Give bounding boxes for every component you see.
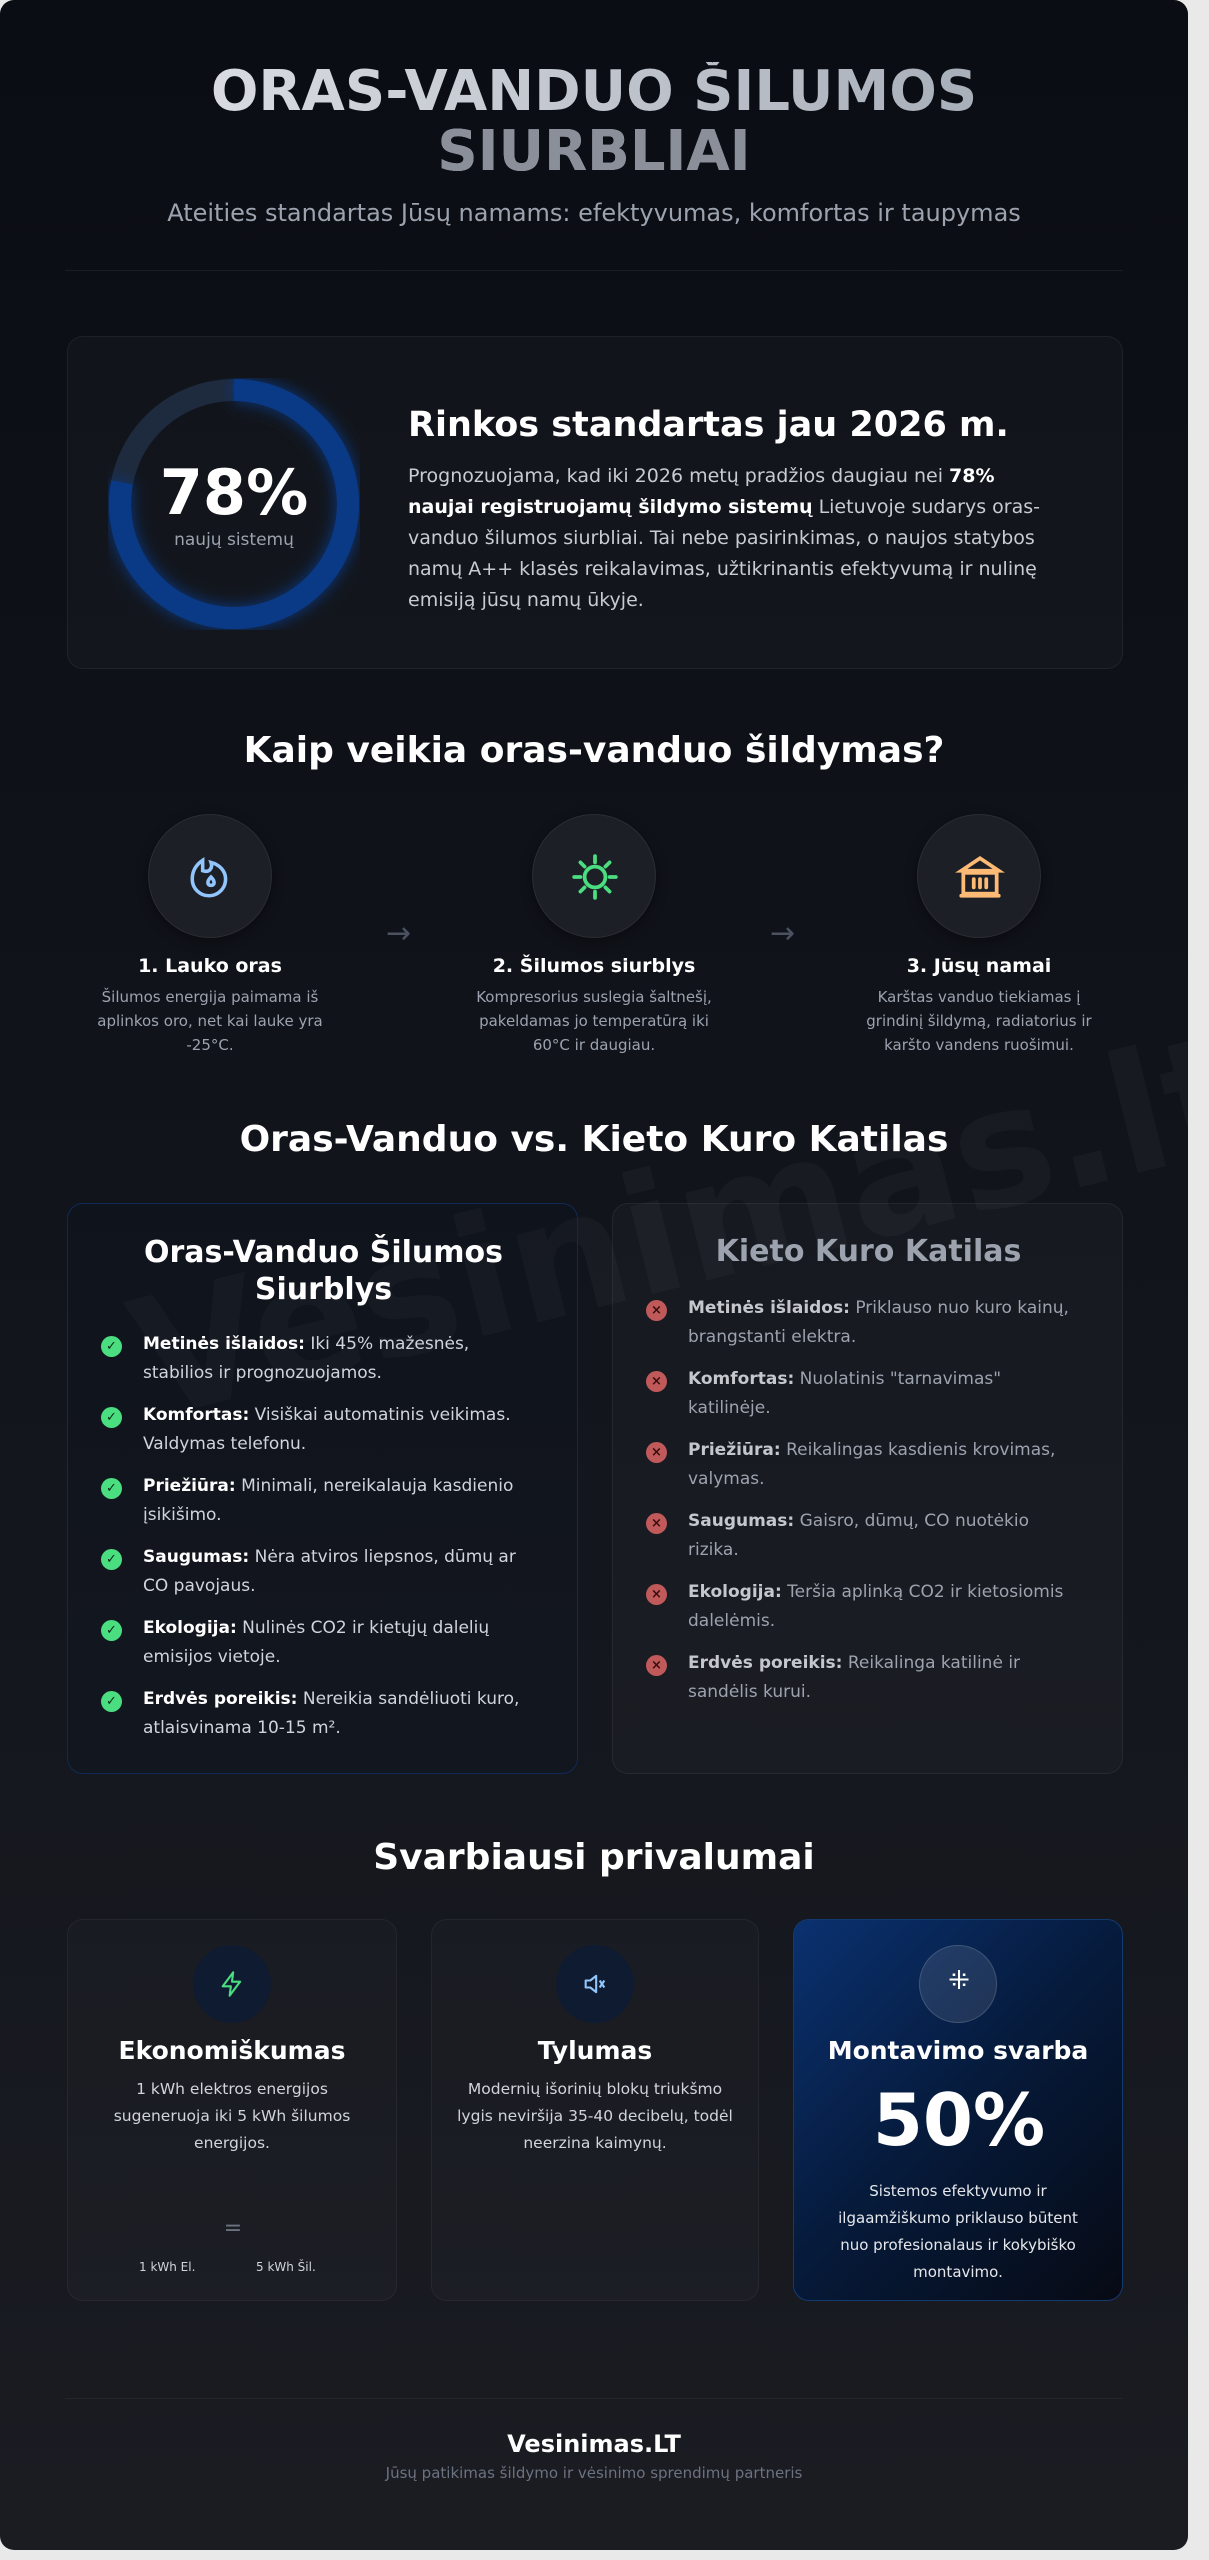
footer: Vesinimas.LT xyxy=(507,2430,681,2458)
panel: heat pump: Komfortas: Visiškai automatinis veikimas. Valdymas telefonu. xyxy=(143,1405,511,1454)
title: ORAS-VANDUO ŠILUMOS xyxy=(211,59,977,124)
panel: heat pump: ✓ xyxy=(106,1339,117,1354)
panel: solid fuel boiler: Komfortas: Nuolatinis "tarnavimas" katilinėje. xyxy=(688,1369,1001,1418)
panel: installation xyxy=(793,1919,1123,2301)
panel: solid fuel boiler: × xyxy=(651,1587,662,1602)
panel: heat pump: ✓ xyxy=(106,1552,117,1567)
panel: installation: ⁜ xyxy=(948,1966,970,1996)
step 2: Kompresorius suslegia šaltnešį, pakeldamas jo temperatūrą iki 60°C ir daugiau. xyxy=(476,988,712,1054)
panel: heat pump: Oras-Vanduo Šilumos xyxy=(144,1235,503,1270)
subtitle: Ateities standartas Jūsų namams: efektyvumas, komfortas ir taupymas xyxy=(167,199,1021,227)
chart: donut 78% xyxy=(108,378,360,630)
panel: heat pump: ✓ xyxy=(106,1481,117,1496)
footer xyxy=(384,2430,802,2482)
panel: solid fuel boiler xyxy=(612,1203,1123,1774)
panel: heat pump: Ekologija: Nulinės CO2 ir kietųjų dalelių emisijos vietoje. xyxy=(143,1618,489,1667)
panel: solid fuel boiler: Saugumas: Gaisro, dūmų, CO nuotėkio rizika. xyxy=(688,1511,1029,1560)
step 3 xyxy=(866,955,1092,1054)
chart: donut 78%: naujų sistemų xyxy=(174,530,294,550)
icon: house xyxy=(917,814,1041,938)
step 1: 1. Lauko oras xyxy=(138,955,282,977)
panel: installation: Sistemos efektyvumo ir ilgaamžiškumo priklauso būtent nuo profesionalaus ir kokybiško montavimo. xyxy=(838,2182,1078,2281)
panel: quietness: Modernių išorinių blokų triukšmo lygis neviršija 35-40 decibelų, todėl neerzina kaimynų. xyxy=(457,2080,733,2152)
step 1: Šilumos energija paimama iš aplinkos oro, net kai lauke yra -25°C. xyxy=(97,988,323,1054)
step 2 xyxy=(476,954,712,1054)
panel: economy: 1 kWh elektros energijos sugeneruoja iki 5 kWh šilumos energijos. xyxy=(114,2080,350,2152)
panel: solid fuel boiler: Metinės išlaidos: Priklauso nuo kuro kainų, brangstanti elektra. xyxy=(688,1298,1069,1347)
panel: solid fuel boiler: × xyxy=(651,1658,662,1673)
panel: heat pump xyxy=(67,1203,578,1774)
title: SIURBLIAI xyxy=(437,119,751,184)
panel: heat pump: Metinės išlaidos: Iki 45% mažesnės, stabilios ir prognozuojamos. xyxy=(143,1334,469,1383)
step 2: 2. Šilumos siurblys xyxy=(493,955,695,977)
panel: quietness xyxy=(431,1919,759,2301)
panel: quietness: Tylumas xyxy=(538,2036,652,2065)
panel: heat pump: Erdvės poreikis: Nereikia sandėliuoti kuro, atlaisvinama 10-15 m². xyxy=(143,1689,519,1738)
panel: installation: Montavimo svarba xyxy=(828,2036,1088,2065)
panel: economy: = xyxy=(224,2216,242,2241)
panel: installation: 50% xyxy=(873,2078,1045,2162)
panel: heat pump: ✓ xyxy=(106,1410,117,1425)
text block: Prognozuojama, kad iki 2026 metų pradžios daugiau nei 78% xyxy=(408,465,995,487)
panel: solid fuel boiler: Ekologija: Teršia aplinką CO2 ir kietosiomis dalelėmis. xyxy=(688,1582,1063,1631)
panel: solid fuel boiler: × xyxy=(651,1516,662,1531)
panel: market standard xyxy=(67,336,1123,669)
heading: Rinkos standartas jau 2026 m. xyxy=(408,405,1009,445)
panel: solid fuel boiler: × xyxy=(651,1445,662,1460)
footer: Jūsų patikimas šildymo ir vėsinimo sprendimų partneris xyxy=(386,2464,802,2482)
panel: solid fuel boiler: × xyxy=(651,1374,662,1389)
panel: economy xyxy=(67,1919,397,2301)
heading: comparison: Oras-Vanduo vs. Kieto Kuro Katilas xyxy=(240,1119,948,1160)
panel: economy: Ekonomiškumas xyxy=(119,2036,345,2065)
panel: economy: 1 kWh El. xyxy=(139,2260,195,2274)
panel: solid fuel boiler: Priežiūra: Reikalingas kasdienis krovimas, valymas. xyxy=(688,1440,1055,1489)
panel: economy: 5 kWh Šil. xyxy=(256,2260,316,2274)
heading: benefits: Svarbiausi privalumai xyxy=(373,1837,815,1878)
panel: solid fuel boiler: Kieto Kuro Katilas xyxy=(716,1234,1021,1269)
icon: sun xyxy=(532,814,656,938)
panel: heat pump: Siurblys xyxy=(255,1272,392,1307)
panel: heat pump: ✓ xyxy=(106,1623,117,1638)
arrow: → xyxy=(386,916,411,951)
step 3: Karštas vanduo tiekiamas į grindinį šildymą, radiatorius ir karšto vandens ruošimui. xyxy=(866,988,1092,1054)
panel: heat pump: Saugumas: Nėra atviros liepsnos, dūmų ar CO pavojaus. xyxy=(143,1547,516,1596)
heading: how it works: Kaip veikia oras-vanduo šildymas? xyxy=(244,730,944,771)
panel: heat pump: ✓ xyxy=(106,1694,117,1709)
chart: donut 78%: 78% xyxy=(160,456,308,529)
arrow: → xyxy=(770,916,795,951)
text block: naujai registruojamų šildymo sistemų Lietuvoje sudarys oras-vanduo šilumos siurbliai. Tai nebe pasirinkimas, o naujos statybos namų A++ klasės reikalavimas, užtikrinantis efektyvumą ir nulinę emisiją jūsų namų ūkyje. xyxy=(408,496,1040,611)
panel: solid fuel boiler: Erdvės poreikis: Reikalinga katilinė ir sandėlis kurui. xyxy=(688,1653,1020,1702)
step 3: 3. Jūsų namai xyxy=(907,955,1051,977)
title xyxy=(0,62,1188,182)
step 1 xyxy=(97,955,323,1054)
panel: solid fuel boiler: × xyxy=(651,1303,662,1318)
icon: outdoor air xyxy=(148,814,272,938)
panel: heat pump: Priežiūra: Minimali, nereikalauja kasdienio įsikišimo. xyxy=(143,1476,513,1525)
